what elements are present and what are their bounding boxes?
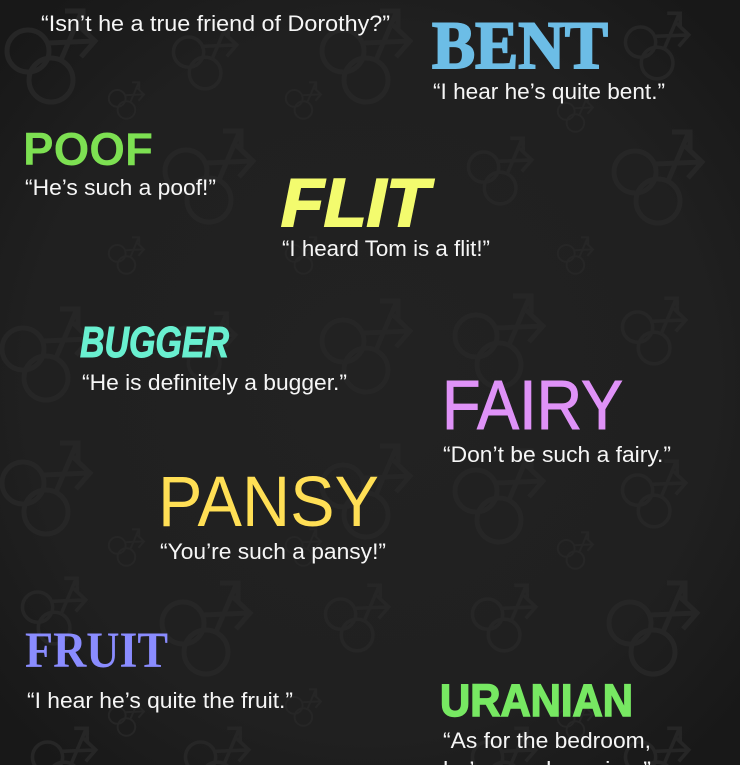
term: FRUIT [25,623,293,713]
term: FLIT [281,165,490,261]
term: BUGGER: “He is definitely a bugger.” [82,370,347,395]
term: BENT: BENT [432,7,608,83]
term: BUGGER: BUGGER [80,318,229,367]
term: POOF [23,123,216,200]
term: FRUIT: FRUIT [25,623,168,679]
term: URANIAN: URANIAN [440,675,633,726]
term: FAIRY: “Don’t be such a fairy.” [443,442,671,467]
term: POOF: “He’s such a poof!” [25,175,216,200]
term: FAIRY [442,366,671,467]
term: PANSY: “You’re such a pansy!” [160,539,386,564]
term: FRUIT: “I hear he’s quite the fruit.” [27,688,293,713]
term: BENT: “I hear he’s quite bent.” [433,79,665,104]
term: FAIRY: FAIRY [442,366,623,444]
term: FLIT: “I heard Tom is a flit!” [282,236,490,261]
term: PANSY: PANSY [158,463,379,542]
term: URANIAN: “As for the bedroom, [443,728,651,753]
term: BUGGER [80,318,347,395]
term: POOF: POOF [23,123,153,175]
term: FLIT: FLIT [281,165,435,241]
term: URANIAN [440,675,651,765]
term: BENT [432,7,665,104]
quote: Dorothy: “Isn’t he a true friend of Dorothy?” [41,11,390,36]
